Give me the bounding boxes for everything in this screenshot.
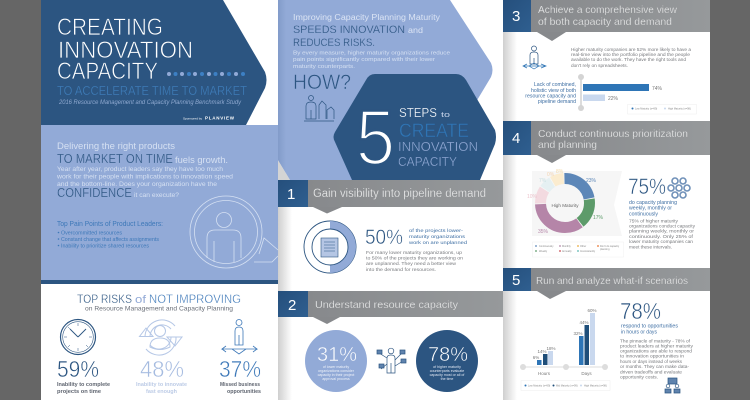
five steps text: CAPACITY	[398, 154, 457, 169]
stat circle: 31%: approval process	[322, 377, 350, 381]
cover subtitle: TO ACCELERATE TIME TO MARKET	[57, 83, 247, 98]
stat: 50%	[365, 226, 467, 249]
step 2 header: Understand resource capacity	[315, 299, 459, 311]
step 1 header	[278, 180, 503, 214]
text block: step 5: driven tradeoffs and evaluate	[620, 370, 683, 374]
intro text: Delivering the right products	[57, 141, 175, 152]
stat: 37%: Missed business	[220, 382, 260, 388]
text block: step 5: opportunity costs.	[620, 374, 658, 380]
five steps text	[398, 106, 478, 169]
step 1 header: Gain visibility into pipeline demand	[313, 188, 486, 200]
intro heading: SPEEDS INNOVATION	[293, 24, 405, 36]
stat: 78%	[620, 298, 678, 336]
stat: 75%: do capacity planning	[629, 200, 677, 206]
intro text: fuels growth.	[175, 155, 228, 166]
intro heading: pain points significantly compared with their lower	[293, 57, 435, 63]
stat: 50%: maturity organizations	[409, 234, 466, 240]
text block: step 4: meet these intervals.	[629, 244, 672, 250]
donut chart: 8%	[556, 169, 564, 175]
stat circle: 31%: 31%	[317, 344, 357, 366]
legend: Monthly	[562, 245, 572, 248]
legend: Weekly	[539, 250, 548, 253]
intro heading: and	[408, 26, 423, 35]
text block: step 1	[366, 250, 464, 272]
bar chart: step 3: 22%	[608, 96, 619, 102]
dotted decoration	[167, 72, 245, 76]
stat: 75%: weekly, monthly or	[629, 206, 672, 212]
stat: 50%: of the projects lower-	[409, 228, 463, 234]
stat: 59%: 59%	[57, 356, 99, 382]
donut chart: 35%	[538, 229, 549, 235]
panel: cover page	[41, 0, 278, 400]
stat: 59%: projects on time	[57, 389, 101, 395]
stat: 50%: 50%	[365, 226, 403, 249]
panel: middle page	[278, 0, 503, 400]
bar chart: step 5: 14%	[537, 349, 547, 354]
legend	[628, 104, 696, 114]
stat circle: 78%: counterparts evaluate	[430, 369, 464, 373]
intro text	[56, 141, 233, 200]
risks heading: TOP RISKS	[77, 294, 132, 306]
intro heading: By every measure, higher maturity organizations reduce	[293, 50, 450, 56]
text block: step 5: The pinnacle of maturity - 78% of	[620, 338, 691, 344]
bar chart: step 3: holistic view of both	[531, 88, 576, 94]
text block: step 3: available to do the work. They have the right tools and	[571, 57, 687, 62]
stat circle: 31%: of lower maturity	[323, 365, 349, 369]
donut chart: High Maturity	[551, 203, 579, 208]
study name: 2016 Resource Management and Capacity Planning Benchmark Study	[58, 100, 242, 106]
step 5 header	[503, 268, 710, 299]
icon: team at screen	[665, 378, 680, 393]
text block: step 5: product leaders at higher maturity	[620, 344, 694, 348]
donut chart: 17%	[593, 215, 604, 221]
text block: step 1: into the demand for resources.	[366, 267, 436, 272]
stat circle: 78%: of higher maturity	[433, 365, 461, 369]
intro heading: Improving Capacity Planning Maturity	[293, 13, 440, 22]
stat: 37%: 37%	[219, 356, 261, 382]
sponsor: PLANVIEW	[205, 116, 235, 120]
cover title: CAPACITY	[57, 58, 158, 85]
sponsor	[183, 116, 235, 120]
step 3 header	[503, 0, 710, 41]
legend: Don't do capacity	[600, 245, 620, 248]
legend: Annually	[562, 250, 572, 253]
text block: step 4: planning weekly, monthly or	[629, 228, 695, 234]
bar chart: step 5	[520, 308, 610, 390]
stat: 75%: 75%	[628, 174, 666, 199]
stat: 78%: in hours or days	[621, 330, 657, 336]
intro text: CONFIDENCE	[57, 185, 132, 200]
text block: step 4: continuously. Only 25% of	[629, 234, 694, 239]
risks heading: of	[135, 294, 147, 306]
intro text: Year after year, product leaders say they have too much	[57, 166, 223, 173]
five steps text: STEPS	[399, 106, 437, 120]
stat circle: 78%	[416, 330, 478, 392]
pain points list: Constant change that affects assignments	[61, 237, 160, 243]
pain points list: Top Pain Points of Product Leaders:	[57, 219, 163, 228]
donut chart	[527, 169, 624, 257]
icon: arrows around person	[140, 320, 182, 355]
icon: network cluster	[668, 178, 690, 198]
legend: planning	[600, 248, 610, 251]
icon: person at crossroads	[523, 46, 546, 69]
stat circle: 78%: capacity most or all of	[430, 373, 464, 377]
stat: 78%: 78%	[620, 298, 661, 324]
stat: 48%: 48%	[140, 356, 184, 382]
icon: person with devices	[377, 348, 406, 373]
legend: Other	[580, 245, 586, 248]
donut chart: 0%	[547, 172, 555, 178]
step 4 header	[503, 121, 710, 163]
bar chart: step 5: 44%	[579, 320, 589, 325]
bar chart: step 5: 60%	[587, 308, 597, 313]
step 4 header: and planning	[538, 139, 597, 151]
bar chart: step 5: 6%	[533, 355, 539, 360]
bar chart: step 5: 18%	[546, 346, 556, 351]
cover title: INNOVATION	[58, 37, 193, 64]
step 3 header: Achieve a comprehensive view	[538, 4, 677, 16]
intro heading: REDUCES RISKS.	[293, 37, 375, 49]
risks heading	[77, 294, 241, 312]
legend: Low Maturity (n=99)	[635, 108, 657, 110]
dark hexagon	[334, 74, 496, 181]
icon: clock	[60, 320, 96, 354]
step 3 header: 3	[512, 8, 520, 25]
intro text: work for their people with implications to innovation speed	[56, 174, 233, 180]
text block: step 3: Higher maturity companies are 52% more likely to have a	[571, 47, 692, 52]
stat: 48%: Inability to innovate	[136, 382, 187, 388]
text block: step 5: or months. They can make data-	[620, 364, 690, 369]
step 4 header: Conduct continuous prioritization	[538, 128, 688, 140]
intro text: TO MARKET ON TIME	[57, 151, 173, 166]
step 3 header: of both capacity and demand	[538, 16, 672, 28]
bar chart: step 3: 74%	[652, 86, 663, 92]
stat: 48%	[136, 356, 187, 395]
light blue hexagon	[278, 0, 492, 180]
five steps text: to	[441, 110, 450, 119]
intro text: it can execute?	[134, 193, 180, 199]
stat: 59%	[57, 356, 110, 395]
divider bar	[41, 280, 278, 284]
cover title: CREATING	[57, 14, 163, 41]
big 5: 5	[356, 93, 395, 181]
stat: 75%: continuously	[629, 212, 658, 218]
stat: 59%: Inability to complete	[57, 382, 110, 388]
panel: right page	[503, 0, 710, 400]
risks heading: NOT IMPROVING	[149, 294, 241, 306]
HOW?: HOW?	[293, 71, 351, 94]
legend: High Maturity (n=98)	[668, 108, 691, 110]
text block: step 4: 75% of higher maturity	[629, 218, 679, 224]
stat circle: 31%: organizations consider	[318, 369, 355, 373]
cover hexagon banner	[41, 0, 266, 125]
legend: Inconsistently	[580, 250, 596, 253]
text block: step 3: real-time view into the portfolio pipeline and the people	[571, 52, 691, 57]
step 1 header: 1	[287, 186, 295, 203]
donut chart: 23%	[586, 178, 597, 184]
bar chart: step 3: resource capacity and	[525, 94, 576, 100]
bar chart: step 3: Lack of combined,	[534, 82, 576, 88]
legend: Mid Maturity (n=99)	[556, 384, 578, 388]
bar chart: step 5: 32%	[573, 331, 583, 336]
stat: 48%: fast enough	[146, 389, 177, 395]
bar chart: step 5: Hours	[538, 371, 551, 376]
sponsor: Sponsored by	[183, 116, 202, 120]
text block: step 4: lower maturity companies can	[629, 239, 694, 244]
text block: step 4: organizations conduct capacity	[629, 224, 696, 228]
legend: Low Maturity (n=99)	[528, 384, 550, 388]
icon: person with growth arrows	[304, 96, 334, 121]
donut chart: 10%	[527, 194, 538, 200]
step 2 header: 2	[288, 297, 296, 314]
bar chart: step 3: pipeline demand	[538, 99, 576, 105]
legend: Continuously	[539, 245, 554, 248]
step 4 header: 4	[512, 130, 520, 147]
text block: step 1: are unplanned. They need a better view	[366, 261, 457, 266]
cover title	[57, 14, 193, 85]
five steps text: INNOVATION	[398, 139, 478, 154]
stat circle: 78%: 78%	[428, 344, 468, 366]
text block: step 3: don't rely on spreadsheets.	[571, 63, 628, 68]
pain points list: Inability to prioritize shared resources	[61, 244, 150, 250]
icon: person at crossroads	[222, 320, 257, 354]
step 2 header	[278, 291, 503, 324]
text block: step 1: For many lower maturity organizations, up	[366, 250, 463, 255]
pain points list: Overcommitted resources	[61, 230, 123, 236]
stat circle: 31%: capacity in their project	[318, 373, 354, 377]
legend	[532, 242, 624, 257]
stat circle: 31%	[305, 330, 367, 392]
intro heading: maturity counterparts.	[293, 64, 356, 70]
periwinkle section	[41, 125, 278, 280]
risks heading: on Resource Management and Capacity Planning	[85, 306, 233, 312]
text block: step 5: to innovation opportunities in	[620, 354, 685, 358]
text block: step 3	[571, 47, 692, 68]
bar chart: step 3	[525, 74, 696, 114]
text block: step 5	[620, 338, 694, 380]
icon: donut with document	[304, 221, 356, 273]
pain points list	[57, 219, 163, 250]
stat circle: 78%: the time	[441, 377, 453, 381]
five steps text: CREATE	[399, 121, 469, 142]
bar chart: step 5: Days	[581, 371, 592, 376]
intro heading	[293, 13, 450, 70]
stat: 78%: respond to opportunities	[621, 324, 678, 330]
stat: 50%: work on are unplanned	[409, 240, 467, 246]
icon: magnifier with person	[190, 196, 278, 268]
stat: 37%	[219, 356, 261, 395]
stat: 75%	[628, 174, 690, 218]
legend	[521, 380, 610, 390]
text block: step 5: organizations are able to respond	[620, 348, 693, 354]
step 5 header: Run and analyze what-if scenarios	[536, 275, 688, 287]
donut chart: 7%	[539, 178, 547, 184]
stat: 37%: opportunities	[227, 389, 261, 395]
text block: step 1: to 50% of the projects they are working on	[366, 256, 464, 260]
text block: step 4	[629, 218, 696, 250]
text block: step 5: hours or days instead of weeks	[620, 359, 683, 364]
intro text: and the bottom-line. Does your organization have the	[57, 181, 217, 188]
legend: High Maturity (n=98)	[584, 384, 607, 388]
step 5 header: 5	[512, 272, 520, 289]
